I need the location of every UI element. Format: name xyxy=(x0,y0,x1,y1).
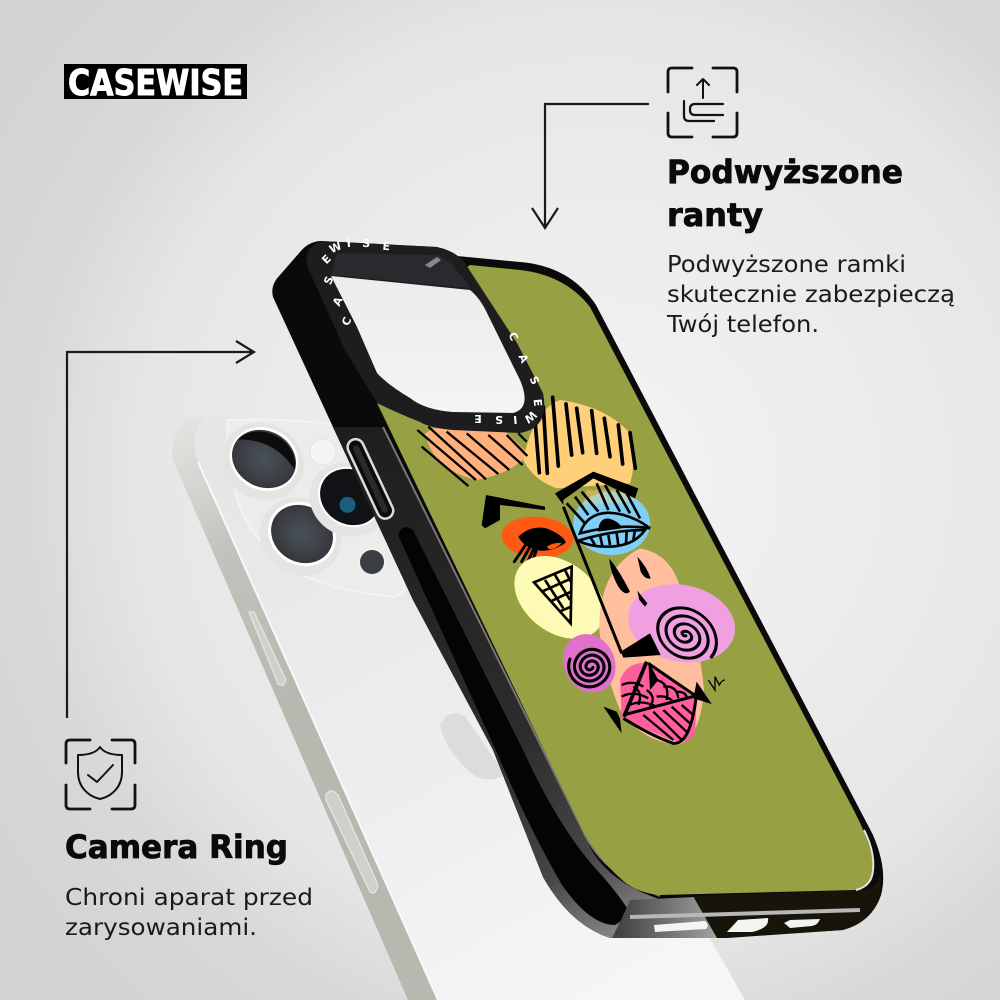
bottom lip dark xyxy=(693,875,881,938)
text: camera ring description xyxy=(65,885,313,941)
arrow: raised edges xyxy=(532,104,649,228)
small spiral xyxy=(563,642,615,693)
phone case xyxy=(272,241,883,938)
lens top xyxy=(208,408,318,515)
side slot xyxy=(398,527,627,925)
ring window xyxy=(331,276,525,413)
text: raised edges description: Twój telefon. xyxy=(666,312,819,338)
microphone xyxy=(359,549,385,575)
text: camera ring description: zarysowaniami. xyxy=(65,915,257,941)
face artwork xyxy=(417,397,742,745)
peach face xyxy=(599,548,704,745)
logo: CASEWISE: CASEWISE xyxy=(68,63,243,104)
magenta circle xyxy=(554,625,625,701)
heading: Podwyższone ranty: ranty xyxy=(667,196,763,234)
camera ring xyxy=(306,237,544,433)
ring lettering: E xyxy=(319,252,334,267)
text: camera ring description: Chroni aparat przed xyxy=(65,885,313,911)
lower translucent side xyxy=(333,427,717,938)
ring lettering: W xyxy=(521,408,539,426)
ring lettering: A xyxy=(515,352,531,366)
ring lettering: E xyxy=(474,412,482,425)
green back panel xyxy=(377,265,873,895)
lens right xyxy=(295,448,401,551)
icon: raised edges xyxy=(668,68,737,137)
side button capsule xyxy=(345,437,396,521)
flash xyxy=(310,439,336,465)
lens bottom xyxy=(245,482,356,591)
cream cheek xyxy=(498,539,620,656)
ring lettering: S xyxy=(321,274,336,287)
heading: Podwyższone ranty xyxy=(667,153,903,234)
arrow: camera ring xyxy=(67,341,254,718)
ring lettering: E xyxy=(382,240,391,253)
ring lettering: C xyxy=(339,315,354,328)
text: raised edges description: skutecznie zabezpieczą xyxy=(667,282,955,308)
ring lettering: E xyxy=(531,398,544,407)
case body xyxy=(272,241,883,938)
ring lettering: C xyxy=(506,330,521,343)
signature xyxy=(708,677,725,690)
ring lettering: A xyxy=(330,294,346,308)
heading: Podwyższone ranty: Podwyższone xyxy=(667,153,903,191)
ring inner wall xyxy=(331,253,470,288)
left brow xyxy=(482,495,545,528)
apple logo xyxy=(440,713,505,779)
nose marks xyxy=(609,557,651,607)
ring lettering: S xyxy=(362,237,371,250)
side buttons xyxy=(249,612,378,893)
bottom highlight xyxy=(630,910,860,917)
ports xyxy=(654,918,820,932)
ring lettering: I xyxy=(513,413,518,426)
large spiral xyxy=(648,596,728,674)
mouth xyxy=(620,663,697,742)
white phone behind the case xyxy=(172,408,745,1000)
bottom lip translucent xyxy=(612,897,717,938)
ring lettering: S xyxy=(495,413,503,426)
heading: Camera Ring: Camera Ring xyxy=(65,828,288,866)
icon: shield xyxy=(66,740,135,809)
ring lettering xyxy=(319,237,544,426)
pink cheek xyxy=(621,575,742,672)
left eye xyxy=(500,514,575,560)
right eye xyxy=(573,492,650,555)
ring lettering: W xyxy=(327,239,344,256)
ring body xyxy=(306,241,544,433)
ring lettering: S xyxy=(527,374,542,387)
striped shapes at top xyxy=(425,427,528,480)
ring lettering: I xyxy=(346,237,351,250)
camera plateau xyxy=(227,420,405,597)
text: raised edges description xyxy=(666,252,955,338)
nose line xyxy=(563,507,622,653)
text: raised edges description: Podwyższone ramki xyxy=(667,252,906,278)
